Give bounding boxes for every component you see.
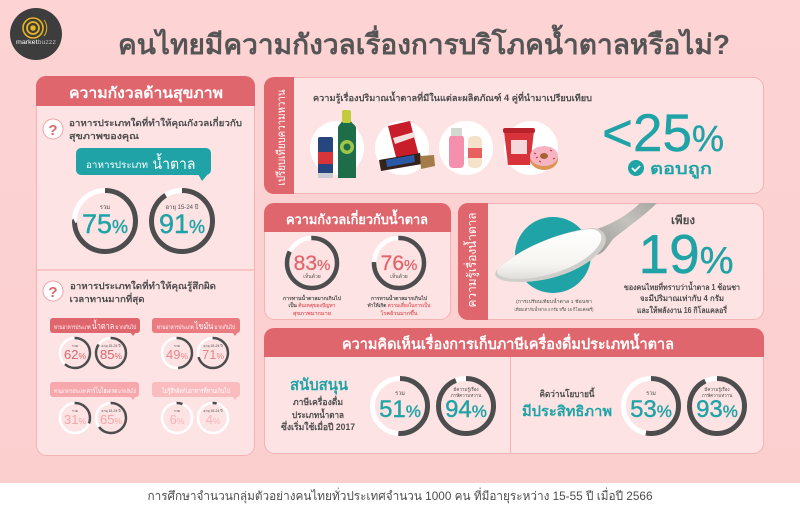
stat: under 25 percent: <25%	[602, 104, 724, 163]
tag: fat: ทานอาหารประเภท ไขมัน มากเกินไป	[157, 321, 235, 331]
donut: no guilt age 4%	[198, 403, 228, 433]
donut: sugar age 85%	[96, 338, 126, 368]
question text 1: อาหารประเภทใดที่ทำให้คุณกังวลเกี่ยวกับ	[69, 116, 242, 129]
donut: carbohydrate age 65%: 65%	[100, 412, 122, 427]
illustration: spoon of sugar	[495, 203, 657, 293]
donut: sugar age 85%: 85%	[100, 347, 122, 362]
heading: health concerns: ความกังวลด้านสุขภาพ	[69, 85, 223, 103]
donut: total 75%: รวม	[100, 204, 110, 211]
donut: carbohydrate total 31%	[60, 403, 90, 433]
text: support	[281, 377, 355, 432]
donut: agree 83%	[287, 238, 337, 288]
source note: (การเปรียบเทียบน้ำตาล 1 ช้อนชา	[516, 298, 593, 304]
stat: 19 percent: 19%	[639, 223, 733, 285]
donut: effective aware 93%	[690, 378, 744, 434]
donut: no guilt total 6%: รวม	[174, 409, 180, 413]
question text 1	[69, 116, 242, 142]
donut: agree 83%: เห็นด้วย	[303, 272, 321, 280]
tag: carbohydrate: ทานอาหารประเภท คาร์โบไฮเดรต มากเกินไป	[54, 386, 136, 395]
donut: sugar total 62%: รวม	[72, 344, 78, 348]
divider	[37, 269, 254, 271]
donut: fat age 71%: อายุ 15-24 ปี	[203, 343, 223, 349]
donut: fat age 71%	[198, 338, 228, 368]
heading: sugar concern	[264, 203, 451, 232]
note: agree 83%	[283, 293, 341, 317]
donut: carbohydrate age 65%	[96, 403, 126, 433]
answer: correct	[628, 160, 712, 180]
donut: effective aware 93%: มีความรู้เรื่อง	[704, 386, 730, 393]
note: agree 76%: โรคอ้วนมากขึ้น	[379, 308, 418, 317]
donut: support total 51%: 51%	[379, 396, 421, 423]
panel caption: ความรู้เรื่องปริมาณน้ำตาลที่มีในแต่ละผลิตภัณฑ์ 4 คู่ที่นำมาเปรียบเทียบ	[313, 91, 592, 104]
donut: agree 83%: 83%	[294, 252, 330, 275]
question text 2: เวลาทานมากที่สุด	[70, 292, 145, 305]
heading: health concerns	[36, 76, 255, 106]
donut: effective aware 93%: ภาษีความหวาน	[702, 393, 732, 398]
title: คนไทยมีความกังวลเรื่องการบริโภคน้ำตาลหรือไม่?	[118, 24, 730, 60]
logo: marketbuzzz	[10, 8, 62, 60]
donut: effective aware 93%: 93%	[696, 396, 738, 423]
divider	[510, 357, 512, 453]
question icon 2	[43, 281, 63, 301]
question text 2	[70, 279, 216, 305]
explanation text	[624, 281, 740, 315]
panel: comparing sweetness	[264, 77, 764, 194]
donut: no guilt age 4%: 4%	[206, 412, 221, 427]
note: agree 76%: การทานน้ำตาลมากเกินไป	[371, 293, 427, 302]
side tab: sugar knowledge	[458, 203, 488, 320]
donut: support aware 94%	[438, 378, 494, 434]
text: effective: คิดว่านโยบายนี้	[540, 387, 595, 399]
tag: no guilt	[152, 382, 240, 400]
panel: sugar knowledge	[458, 203, 764, 320]
tag: no guilt: ไม่รู้สึกผิดกับอาหารที่ทานเกินไป	[161, 386, 230, 395]
donut: support aware 94%: ภาษีความหวาน	[451, 393, 481, 398]
panel: sugar tax opinion	[264, 328, 764, 454]
tag: sugar	[50, 318, 140, 336]
donut: total 75%	[74, 190, 136, 252]
question text 2: อาหารประเภทใดที่ทำให้คุณรู้สึกผิด	[70, 279, 216, 292]
text: only: เพียง	[671, 214, 695, 227]
question icon 2: ?	[48, 284, 58, 301]
donut: effective total 53%: 53%	[630, 396, 672, 423]
donut: total 75%: 75%	[82, 209, 128, 239]
footer band	[0, 483, 800, 511]
donut: agree 76%: 76%	[381, 252, 417, 275]
text: support: ประเภทน้ำตาล	[292, 408, 344, 420]
logo: marketbuzzz: market buzzz	[16, 40, 56, 46]
note: agree 83%: สุขภาพมากมาย	[293, 311, 331, 317]
callout: sugar food type: อาหารประเภท	[86, 160, 148, 171]
text: effective	[522, 387, 612, 419]
product pair: pink milk and yogurt drink	[439, 121, 493, 175]
question icon 1: ?	[48, 122, 58, 139]
donut: fat total 49%: รวม	[174, 344, 180, 348]
source note: เทียบเท่ากับน้ำตาล 4 กรัม หรือ 16 กิโลแคลอรี่)	[514, 306, 594, 312]
explanation text: ของคนไทยที่ทราบว่าน้ำตาล 1 ช้อนชา	[624, 281, 740, 292]
note: agree 83%: เป็น ต้นเหตุของปัญหา	[288, 301, 336, 309]
donut: sugar total 62%	[60, 338, 90, 368]
note: agree 76%: ทำให้เกิด ความเสี่ยงในการเป็น	[368, 301, 431, 309]
donut: fat age 71%: 71%	[202, 347, 224, 362]
callout: sugar food type: น้ำตาล	[152, 153, 196, 173]
side tab: comparing sweetness: เปรียบเทียบความหวาน	[275, 89, 288, 186]
question text 1: สุขภาพของคุณ	[69, 131, 140, 142]
answer: correct: ตอบถูก	[650, 161, 712, 180]
text: support: ภาษีเครื่องดื่ม	[293, 395, 343, 407]
question icon 1	[43, 119, 63, 139]
donut: support aware 94%: 94%	[445, 396, 487, 423]
side tab: comparing sweetness	[264, 77, 294, 194]
product pair: energy drink and green tea	[310, 110, 364, 178]
explanation text: จะมีปริมาณเท่ากับ 4 กรัม	[640, 293, 724, 303]
donut: age 15-24 91%	[152, 190, 212, 252]
donut: age 15-24 91%: อายุ 15-24 ปี	[166, 203, 199, 211]
donut: sugar total 62%: 62%	[64, 347, 86, 362]
donut: no guilt total 6%: 6%	[170, 412, 185, 427]
product pair: cup drink and doughnut	[503, 121, 558, 175]
callout: sugar food type	[76, 148, 211, 181]
text: support: สนับสนุน	[290, 377, 348, 395]
explanation text: และให้พลังงาน 16 กิโลแคลอรี่	[637, 304, 728, 315]
heading: sugar concern: ความกังวลเกี่ยวกับน้ำตาล	[286, 209, 428, 227]
donut: agree 76%: เห็นด้วย	[390, 272, 408, 280]
donut: sugar age 85%: อายุ 15-24 ปี	[101, 343, 121, 349]
donut: effective total 53%: รวม	[646, 391, 656, 397]
donut: support aware 94%: มีความรู้เรื่อง	[453, 386, 479, 393]
donut: support total 51%	[372, 378, 428, 434]
donut: effective total 53%	[624, 378, 678, 434]
footer source text: การศึกษาจำนวนกลุ่มตัวอย่างคนไทยทั่วประเทศจำนวน 1000 คน ที่มีอายุระหว่าง 15-55 ปี เมื่อปี 2566	[148, 487, 653, 504]
donut: carbohydrate total 31%: 31%	[64, 412, 86, 427]
tag: fat	[152, 318, 240, 336]
donut: carbohydrate total 31%: รวม	[72, 409, 78, 413]
donut: fat total 49%	[162, 338, 192, 368]
product pair: cola and chocolate bar	[375, 121, 435, 175]
tag: sugar: ทานอาหารประเภท น้ำตาล มากเกินไป	[54, 319, 136, 331]
text: effective: มีประสิทธิภาพ	[522, 403, 612, 419]
source note	[514, 298, 594, 312]
donut: agree 76%	[374, 238, 424, 288]
text: support: ซึ่งเริ่มใช้เมื่อปี 2017	[281, 420, 355, 432]
panel: health concerns	[36, 76, 255, 456]
note: agree 76%	[368, 293, 431, 317]
tag: carbohydrate	[50, 382, 139, 400]
donut: fat total 49%: 49%	[166, 347, 188, 362]
side tab: sugar knowledge: ความรู้เรื่องน้ำตาล	[463, 212, 480, 308]
donut: support total 51%: รวม	[395, 391, 405, 397]
note: agree 83%: การทานน้ำตาลมากเกินไป	[283, 293, 341, 302]
panel: sugar concern	[264, 203, 451, 320]
donut: no guilt total 6%	[162, 403, 192, 433]
donut: no guilt age 4%: อายุ 15-24 ปี	[203, 408, 223, 414]
donut: carbohydrate age 65%: อายุ 15-24 ปี	[101, 408, 121, 414]
donut: age 15-24 91%: 91%	[159, 209, 205, 239]
heading: sugar tax opinion: ความคิดเห็นเรื่องการเก็บภาษีเครื่องดื่มประเภทน้ำตาล	[342, 333, 674, 353]
heading: sugar tax opinion	[264, 328, 764, 357]
